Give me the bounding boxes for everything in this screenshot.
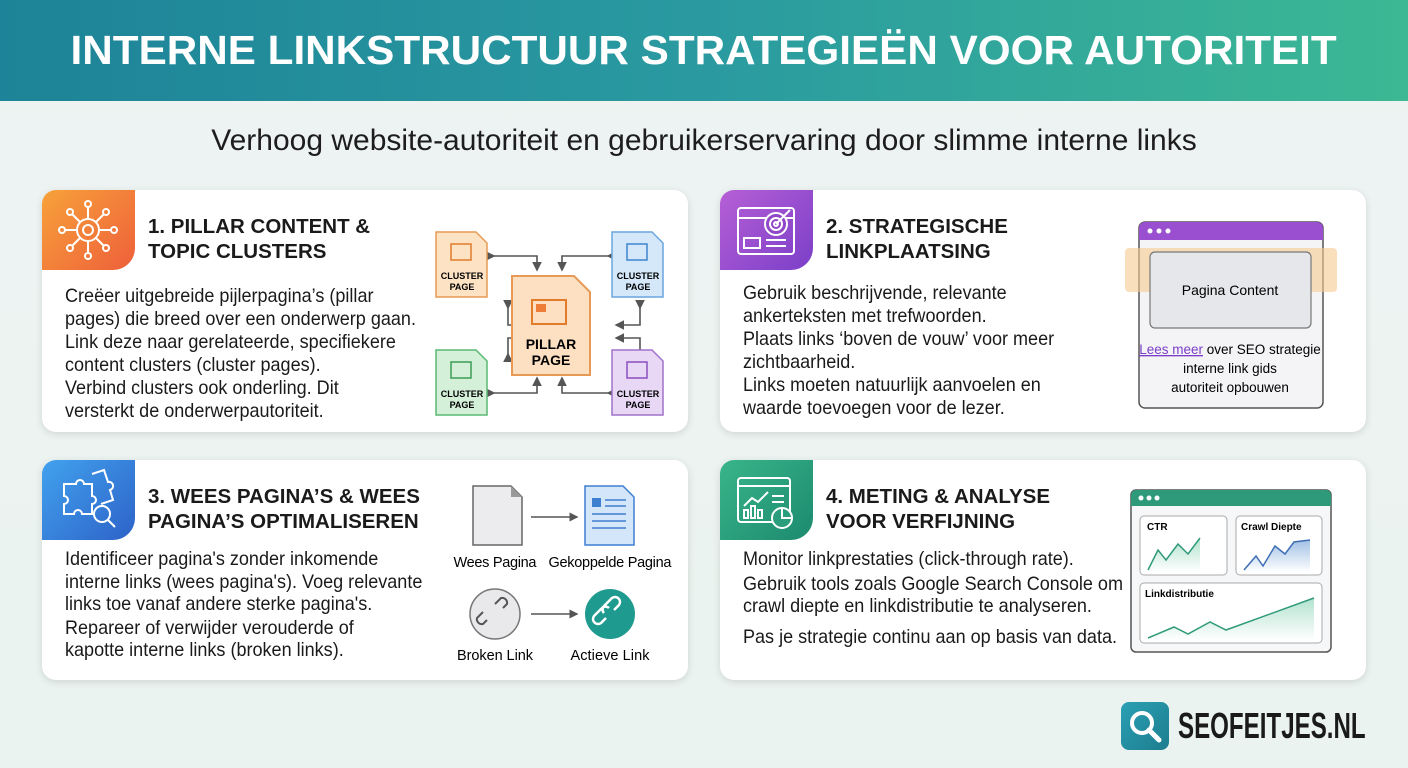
body text: Links moeten natuurlijk aanvoelen en [743, 374, 1041, 396]
icon: puzzle search [42, 460, 135, 540]
cluster page blue [612, 232, 663, 297]
diagram: orphan to linked, broken to active: Actieve Link [570, 648, 650, 664]
dashboard mockup: Crawl Diepte [1241, 522, 1302, 533]
body text: waarde toevoegen voor de lezer. [743, 396, 1005, 418]
panel: pillar content [42, 190, 688, 432]
body text [65, 285, 416, 422]
body text: crawl diepte en linkdistributie te analyseren. [743, 595, 1092, 617]
cluster page purple: CLUSTER [617, 389, 660, 399]
browser mockup [1125, 221, 1337, 409]
diagram: orphan to linked, broken to active: Broken Link [457, 648, 534, 664]
browser mockup: interne link gids [1183, 361, 1277, 376]
body text: content clusters (cluster pages). [65, 354, 321, 376]
heading: PAGINA’S OPTIMALISEREN [148, 510, 419, 533]
heading: 3. WEES PAGINA’S & WEES [148, 485, 420, 508]
body text [743, 282, 1054, 418]
body text: versterkt de onderwerpautoriteit. [65, 400, 324, 422]
cluster page orange: PAGE [450, 282, 474, 292]
panel: strategische linkplaatsing [720, 190, 1366, 432]
body text: Link deze naar gerelateerde, specifiekere [65, 331, 396, 353]
body text: Pas je strategie continu aan op basis van data. [743, 626, 1117, 648]
body text [743, 548, 1123, 648]
cluster page green [436, 350, 487, 415]
heading: 1. PILLAR CONTENT & [148, 215, 370, 238]
body text: Repareer of verwijder verouderde of [65, 616, 354, 638]
cluster page green: PAGE [450, 400, 474, 410]
body text: Creëer uitgebreide pijlerpagina’s (pillar [65, 285, 373, 307]
body text: interne links (wees pagina's). Voeg relevante [65, 570, 422, 592]
cluster page orange: CLUSTER [441, 271, 484, 281]
icon: magnifier [1121, 702, 1169, 750]
diagram: orphan to linked, broken to active [454, 485, 672, 664]
heading [826, 215, 1008, 263]
body text [65, 548, 422, 661]
title: INTERNE LINKSTRUCTUUR STRATEGIEËN VOOR AUTORITEIT [71, 27, 1337, 73]
body text: Gebruik tools zoals Google Search Console om [743, 572, 1123, 594]
cluster page green: CLUSTER [441, 389, 484, 399]
icon: hub network [42, 190, 135, 270]
panel: meting en analyse [720, 460, 1366, 680]
heading [148, 215, 370, 263]
cluster page orange [436, 232, 487, 297]
heading: 4. METING & ANALYSE [826, 485, 1050, 508]
icon: target [720, 190, 813, 270]
browser mockup: autoriteit opbouwen [1171, 380, 1289, 395]
body text: Identificeer pagina's zonder inkomende [65, 548, 378, 570]
pillar page [512, 276, 590, 375]
logo [1121, 702, 1366, 750]
browser mockup: Pagina Content [1182, 282, 1278, 298]
cluster page blue: PAGE [626, 282, 650, 292]
pillar page: PILLAR [526, 336, 576, 352]
heading: LINKPLAATSING [826, 240, 991, 263]
panel: wees pagina's [42, 460, 688, 680]
heading: 2. STRATEGISCHE [826, 215, 1008, 238]
heading [148, 485, 420, 533]
body text: Plaats links ‘boven de vouw’ voor meer [743, 328, 1054, 350]
heading: TOPIC CLUSTERS [148, 240, 326, 263]
browser mockup: Lees meer over SEO strategie [1139, 342, 1321, 357]
subtitle: Verhoog website-autoriteit en gebruikerservaring door slimme interne links [211, 124, 1197, 157]
body text: ankerteksten met trefwoorden. [743, 304, 987, 326]
body text: Monitor linkprestaties (click-through rate). [743, 548, 1074, 570]
heading: VOOR VERFIJNING [826, 510, 1015, 533]
diagram: orphan to linked, broken to active: Gekoppelde Pagina [548, 555, 672, 571]
cluster page purple [612, 350, 663, 415]
cluster page purple: PAGE [626, 400, 650, 410]
body text: zichtbaarheid. [743, 350, 855, 372]
body text: kapotte interne links (broken links). [65, 639, 344, 661]
body text: Gebruik beschrijvende, relevante [743, 282, 1007, 304]
icon: analytics [720, 460, 813, 540]
pillar page: PAGE [532, 352, 570, 368]
dashboard mockup: CTR [1147, 522, 1168, 533]
body text: pages) die breed over een onderwerp gaan. [65, 308, 416, 330]
logo text: SEOFEITJES.NL [1178, 705, 1366, 746]
dashboard mockup [1130, 489, 1332, 653]
diagram: pillar and clusters [435, 231, 664, 416]
dashboard mockup: Linkdistributie [1145, 589, 1214, 600]
diagram: orphan to linked, broken to active: Wees Pagina [454, 555, 537, 571]
heading [826, 485, 1050, 533]
body text: Verbind clusters ook onderling. Dit [65, 377, 339, 399]
header band [0, 0, 1408, 101]
body text: links toe vanaf andere sterke pagina's. [65, 593, 372, 615]
cluster page blue: CLUSTER [617, 271, 660, 281]
